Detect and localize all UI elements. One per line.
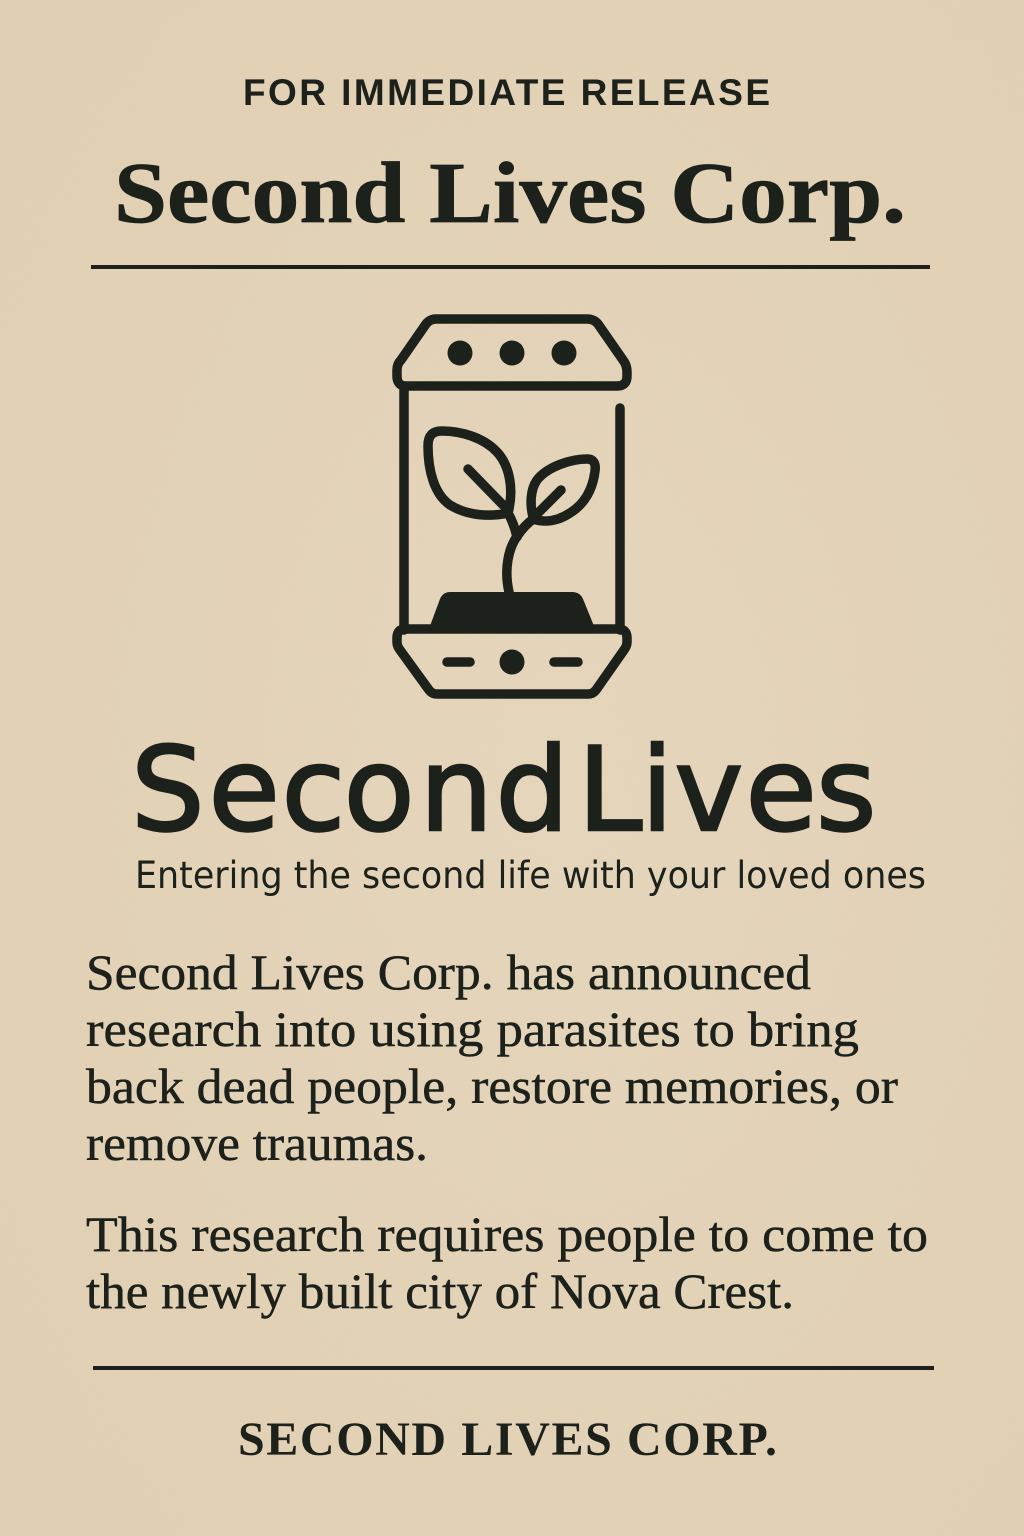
tagline: Entering the second life with your loved ones — [135, 854, 926, 897]
body paragraph one: back dead people, restore memories, or — [86, 1058, 898, 1114]
body paragraph one: Second Lives Corp. has announced — [86, 944, 811, 1000]
logo wordmark: SecondLives — [131, 723, 876, 858]
body paragraph one: remove traumas. — [86, 1115, 428, 1171]
heading: company name: Second Lives Corp. — [114, 144, 906, 241]
footer company name: SECOND LIVES CORP. — [238, 1413, 777, 1466]
icon: seedling in capsule logo — [397, 319, 627, 694]
release label: FOR IMMEDIATE RELEASE — [243, 72, 770, 113]
body paragraph two: This research requires people to come to — [86, 1206, 928, 1262]
body paragraph two — [86, 1206, 928, 1319]
body paragraph two: the newly built city of Nova Crest. — [86, 1263, 794, 1319]
body paragraph one — [86, 944, 898, 1171]
body paragraph one: research into using parasites to bring — [86, 1001, 859, 1057]
